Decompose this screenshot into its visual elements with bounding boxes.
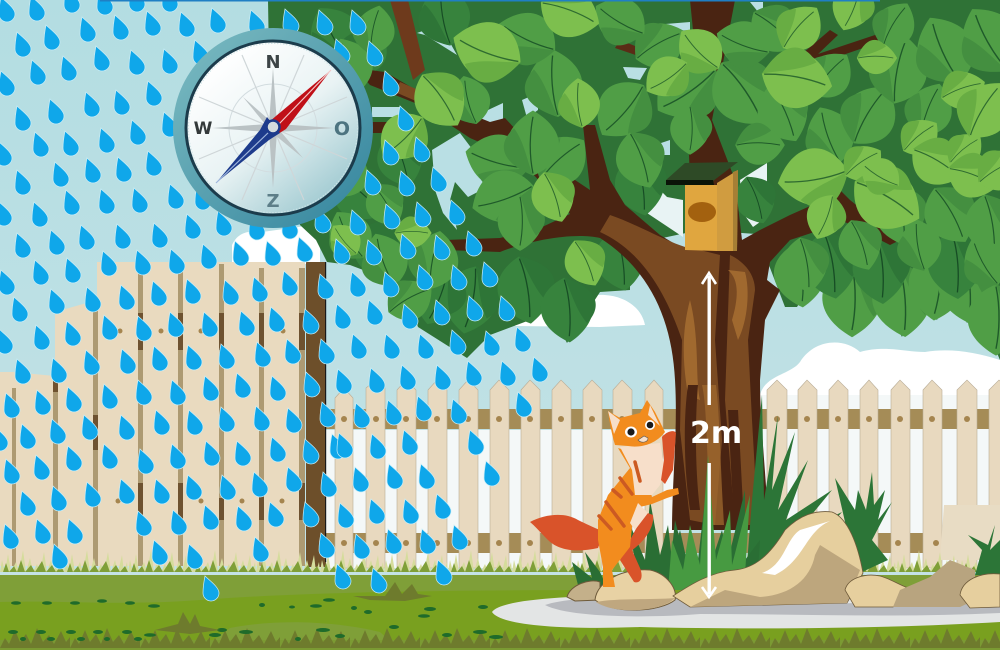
brown grass tufts [155, 582, 432, 634]
panel: right picket fence [326, 380, 1000, 570]
panel: tree leaves in front [316, 0, 1000, 330]
compass outer ring [173, 28, 373, 228]
tree canopy mass [268, 0, 1000, 360]
panel: raindrops [0, 0, 548, 601]
height label: 2m [690, 416, 742, 451]
panel: tree leaves behind branches [295, 0, 1000, 356]
panel: compass: O [334, 118, 350, 140]
mid-green leaves [316, 0, 1000, 330]
arrow: 2 m height down [702, 463, 716, 597]
panel: large left fence [0, 262, 305, 566]
cat hind leg [620, 512, 653, 582]
arrow: 2 m height up [702, 273, 716, 405]
fence post [306, 262, 326, 567]
lawn specks [8, 598, 503, 641]
panel: orange cat [530, 400, 679, 587]
panel: compass: W [194, 119, 213, 139]
cat chest [620, 443, 665, 495]
top edge line [100, 0, 880, 2]
compass letters: N [265, 52, 281, 73]
stone path [492, 595, 1000, 628]
cat head [608, 400, 665, 447]
cat body [598, 448, 679, 587]
compass rim [186, 41, 360, 215]
compass needle [216, 70, 331, 183]
panel: compass: Z [266, 191, 280, 212]
cat eyes [625, 420, 655, 442]
panel: birdhouse [666, 162, 738, 251]
cat belly [630, 503, 648, 530]
sky gaps in canopy [372, 2, 877, 257]
cat tail [530, 515, 604, 550]
light-green leaves [320, 0, 1000, 294]
panel: compass [173, 28, 373, 228]
lawn [0, 550, 1000, 650]
clouds [232, 224, 1000, 400]
compass rose [199, 55, 347, 200]
cat stripes [599, 462, 640, 529]
tree trunk and branches [355, 0, 900, 530]
panel: grass clump under the tree [572, 395, 1000, 590]
cat raised far arm [661, 431, 676, 484]
panel: rocks [567, 512, 1000, 610]
